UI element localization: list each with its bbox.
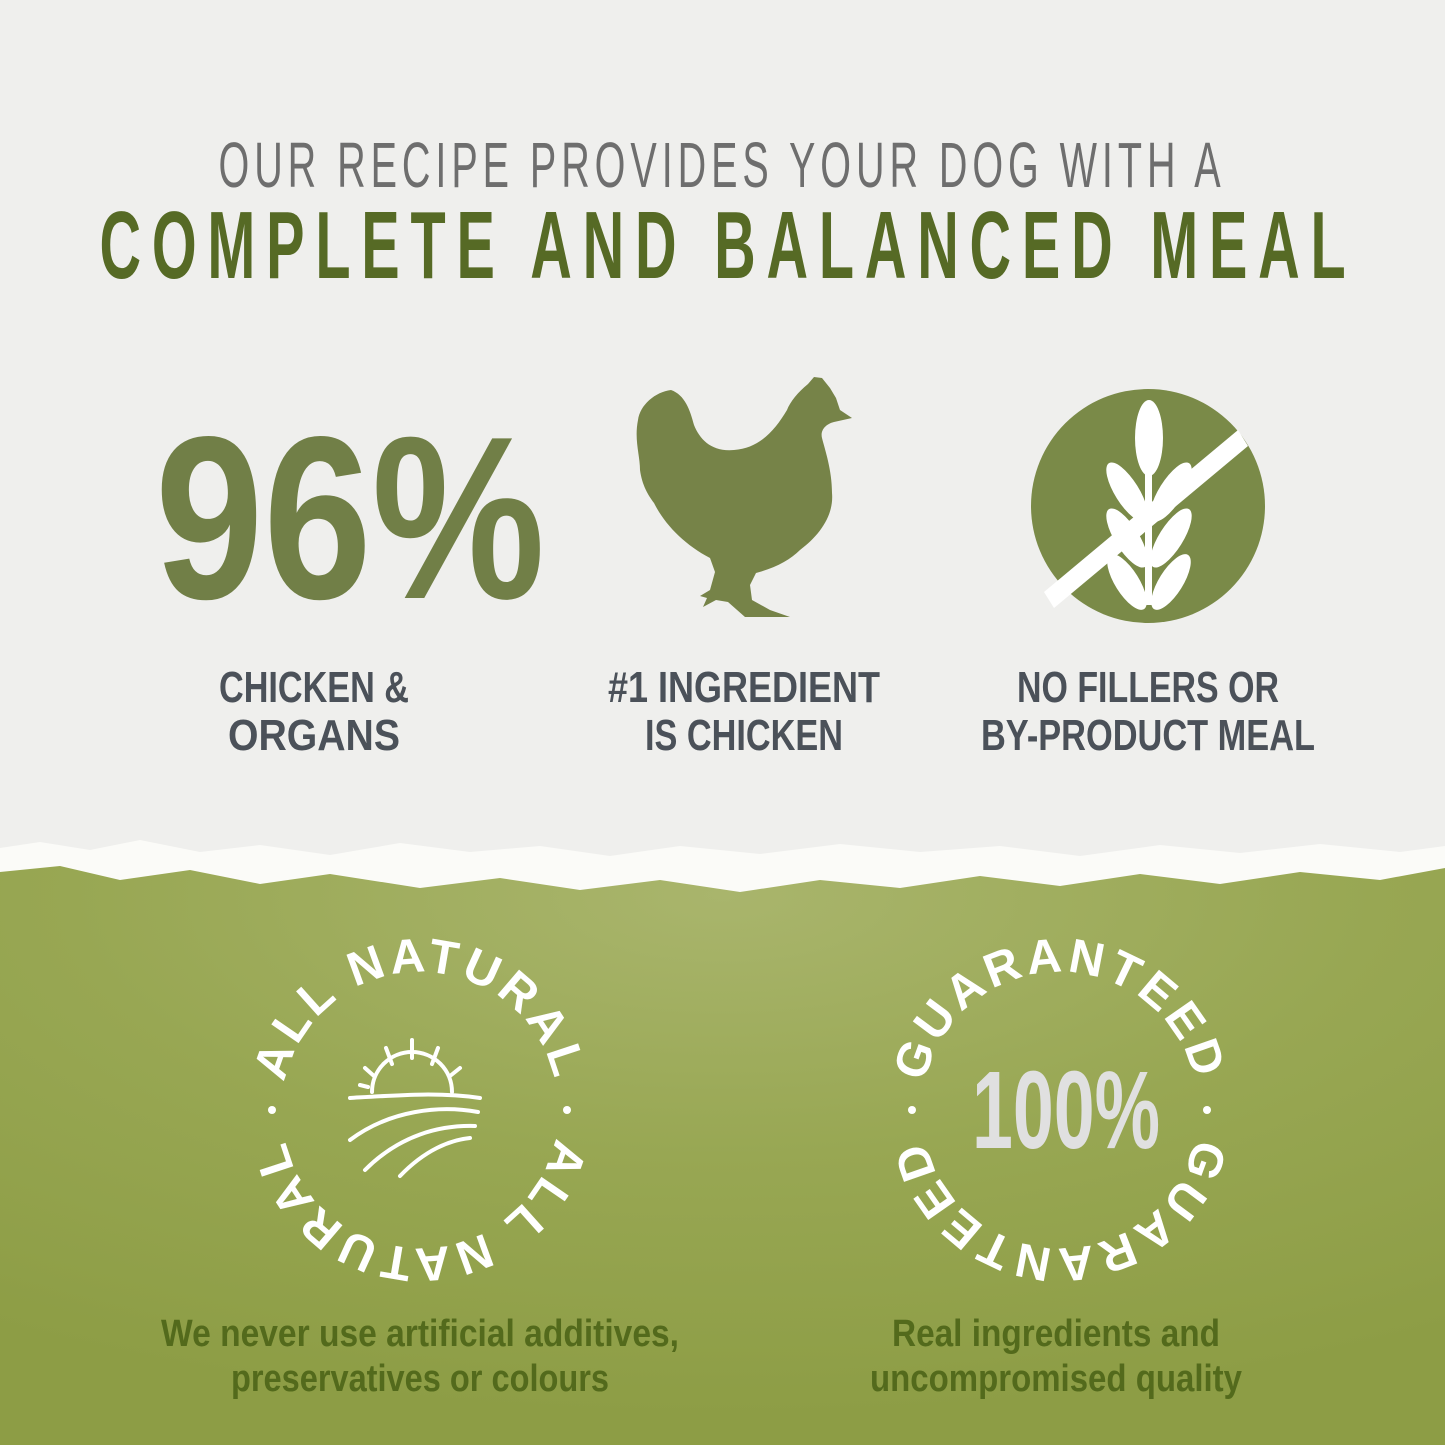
badge: all natural	[256, 938, 584, 1282]
icon: no grain	[1031, 389, 1265, 623]
badge: guaranteed 100%: 100%	[972, 1049, 1160, 1172]
text: guaranteed description	[870, 1313, 1242, 1400]
badge: guaranteed 100%: GUARANTEED	[896, 939, 1222, 1076]
label: chicken & organs: CHICKEN &	[219, 663, 409, 712]
label: no fillers	[981, 663, 1315, 760]
badge: guaranteed 100%: GUARANTEED	[898, 1144, 1224, 1282]
text: guaranteed description: uncompromised quality	[870, 1358, 1242, 1400]
label: #1 ingredient	[608, 663, 880, 760]
badge: all natural: ALL NATURAL	[260, 1138, 584, 1282]
title	[100, 129, 1356, 299]
label: chicken & organs: ORGANS	[228, 711, 400, 760]
label: #1 ingredient: IS CHICKEN	[645, 711, 843, 760]
text: all natural description: We never use artificial additives,	[161, 1313, 679, 1355]
badge: all natural: ALL NATURAL	[256, 938, 580, 1082]
badge: guaranteed 100%	[896, 939, 1224, 1282]
text: all natural description: preservatives or colours	[231, 1358, 609, 1400]
green section with torn edge	[0, 840, 1445, 1445]
text: all natural description	[161, 1313, 679, 1400]
text: guaranteed description: Real ingredients and	[892, 1313, 1220, 1355]
stat: 96%: 96%	[155, 389, 545, 648]
label: chicken & organs	[219, 663, 409, 760]
icon: chicken	[637, 377, 852, 617]
label: #1 ingredient: #1 INGREDIENT	[608, 663, 880, 712]
label: no fillers: BY-PRODUCT MEAL	[981, 711, 1315, 760]
icon: sun over fields	[350, 1040, 480, 1176]
label: no fillers: NO FILLERS OR	[1017, 663, 1279, 712]
